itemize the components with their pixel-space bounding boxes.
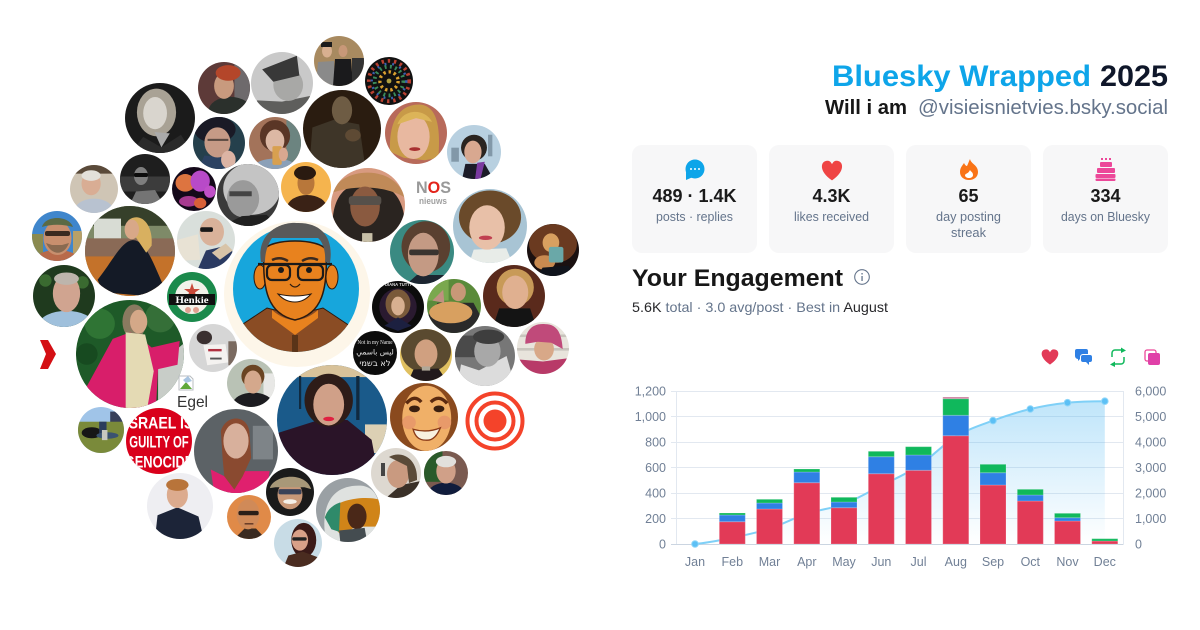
right axis labels: 6,000 — [1135, 384, 1166, 398]
logo: NOS nieuws — [416, 178, 451, 207]
month labels — [685, 555, 1116, 569]
icon: heart — [822, 161, 842, 180]
avatar: woman with pink hat — [517, 322, 569, 374]
right axis labels — [1135, 384, 1166, 552]
avatar: man with cap — [32, 211, 82, 261]
avatar: person with black dog — [78, 407, 124, 453]
month labels: Sep — [982, 555, 1004, 569]
logo: NOS nieuws: NOS — [416, 178, 451, 197]
right axis labels: 4,000 — [1135, 436, 1166, 450]
left axis labels — [635, 384, 666, 552]
icon: flame — [960, 159, 978, 180]
panel: day posting streak: day posting — [936, 210, 1001, 224]
engagement summary: 5.6K total · 3.0 avg/post · Best in August — [632, 299, 888, 315]
icon: info — [855, 270, 869, 284]
panel: days on Bluesky: 334 — [1090, 186, 1121, 206]
panel: likes received: likes received — [794, 210, 869, 224]
avatar: man with curly grey hair — [400, 329, 452, 381]
month labels: May — [832, 555, 857, 569]
avatar: man in navy sweater — [147, 473, 213, 539]
avatar: man in dark room — [303, 90, 381, 168]
avatar: woman in pink coat — [76, 300, 184, 408]
title year: 2025 — [1100, 60, 1168, 93]
avatar: portrait in black ring — [372, 281, 424, 333]
right axis labels: 2,000 — [1135, 486, 1166, 500]
avatar: bald man in sunglasses — [177, 211, 235, 269]
icon: broken image — [179, 376, 193, 390]
month labels: Aug — [945, 555, 967, 569]
panel: posts and replies: posts · replies — [656, 210, 733, 224]
avatar: man on yellow — [281, 162, 331, 212]
icon: birthday cake — [1096, 158, 1116, 181]
avatar: Henkie beer logo: Henkie — [176, 295, 208, 305]
right axis labels: 1,000 — [1135, 512, 1166, 526]
avatar: short-haired woman — [227, 359, 275, 407]
icon: reposts legend — [1110, 348, 1126, 367]
panel: posts and replies: 489 · 1.4K — [652, 186, 736, 206]
avatar: man with long hair and glasses — [390, 220, 454, 284]
avatar: woman in dark sweater — [277, 365, 387, 475]
avatar: curly man with glasses — [193, 116, 245, 169]
avatar: main cartoon man — [224, 221, 370, 367]
month labels: Jun — [871, 555, 891, 569]
avatar: red target logo — [468, 394, 522, 448]
panel: days on Bluesky — [1043, 145, 1168, 253]
icon: quotes legend — [1145, 350, 1160, 365]
avatar: Israel is guilty of genocide: GUILTY OF — [129, 434, 189, 452]
avatar: blonde woman on sofa — [85, 206, 175, 296]
avatar: army man — [251, 52, 313, 114]
icon: likes legend — [1042, 349, 1058, 365]
left axis labels: 200 — [645, 512, 666, 526]
avatar: blonde woman black and white — [125, 83, 195, 153]
cumulative area — [695, 401, 1105, 544]
left axis labels: 600 — [645, 461, 666, 475]
avatar: smiling woman with hat — [266, 468, 314, 516]
avatar: Not in my Name: ليس باسمي — [356, 347, 394, 356]
left axis labels: 1,000 — [635, 410, 666, 424]
month labels: Apr — [797, 555, 817, 569]
avatar: white-haired older man — [424, 451, 468, 495]
icon: replies legend — [1075, 349, 1092, 365]
avatar: two men in suits — [314, 36, 364, 86]
heading: Your Engagement: Your Engagement — [632, 265, 843, 292]
avatar: woman with curly blonde hair — [483, 265, 545, 327]
month labels: Jul — [911, 555, 926, 569]
avatar: Not in my Name — [353, 331, 397, 375]
right axis labels: 0 — [1135, 538, 1142, 552]
logo: NOS nieuws: nieuws — [419, 196, 447, 207]
label: Egel alt text: Egel — [177, 394, 208, 411]
avatar: white-haired man — [70, 165, 118, 213]
month labels: Feb — [722, 555, 743, 569]
avatar: Israel is guilty of genocide: ISRAEL IS — [125, 414, 193, 432]
avatar: sunglasses man dark — [120, 154, 170, 204]
icon: red chevron — [40, 340, 56, 369]
user name: Will i am — [825, 97, 907, 119]
month labels: Dec — [1094, 555, 1116, 569]
avatar cluster — [32, 36, 579, 567]
avatar: man on green foliage — [33, 265, 95, 327]
icon: speech bubble — [686, 160, 704, 180]
panel: day posting streak — [906, 145, 1031, 253]
month labels: Mar — [759, 555, 780, 569]
chart legend — [1042, 348, 1160, 367]
avatar: Not in my Name: Not in my Name — [357, 340, 393, 346]
month labels: Jan — [685, 555, 705, 569]
line points — [692, 398, 1108, 547]
avatar: man in profile — [371, 448, 421, 498]
avatar: ski goggles — [316, 478, 380, 542]
avatar: Israel is guilty of genocide — [125, 408, 193, 474]
avatar: coffee illustration — [527, 224, 579, 276]
right axis labels: 5,000 — [1135, 410, 1166, 424]
avatar: grey-haired woman — [217, 163, 280, 226]
avatar: purple abstract — [172, 167, 216, 211]
stacked bars — [719, 397, 1118, 544]
avatar: black and white portrait — [455, 326, 515, 386]
avatar: woman with skyline — [447, 125, 501, 179]
title: Bluesky Wrapped — [832, 60, 1091, 93]
avatar: blonde woman — [385, 102, 447, 164]
right axis labels: 3,000 — [1135, 461, 1166, 475]
panel: posts and replies — [632, 145, 757, 253]
avatar: woman in sunglasses — [274, 519, 322, 567]
avatar: portrait in black ring: DIANA TUTTI — [385, 282, 411, 287]
avatar: woman with hat and curly hair — [331, 168, 405, 242]
avatar: Israel is guilty of genocide: GENOCIDE — [125, 453, 193, 471]
avatar: Not in my Name: לא בשמי — [359, 358, 391, 368]
left axis labels: 1,200 — [635, 384, 666, 398]
panel: likes received — [769, 145, 894, 253]
panel: day posting streak: streak — [951, 226, 987, 240]
avatar: curly-haired woman — [453, 189, 527, 263]
avatar: protest sign photo — [189, 324, 237, 372]
cumulative line — [695, 401, 1105, 544]
avatar: bald man on orange — [227, 495, 271, 539]
panel: days on Bluesky: days on Bluesky — [1061, 210, 1151, 224]
avatar: woman in pink top — [194, 409, 278, 493]
avatar: cartoon woman — [390, 383, 458, 451]
avatar: red-haired man — [198, 62, 250, 114]
panel: likes received: 4.3K — [812, 186, 850, 206]
chart: monthly engagement with cumulative line — [635, 384, 1166, 569]
left axis labels: 400 — [645, 486, 666, 500]
avatar: rose window — [365, 57, 413, 105]
user handle: @visieisnietvies.bsky.social — [918, 97, 1168, 119]
panel: day posting streak: 65 — [958, 186, 979, 206]
left axis labels: 800 — [645, 436, 666, 450]
month labels: Oct — [1021, 555, 1041, 569]
avatar: man holding dog — [427, 279, 481, 333]
left axis labels: 0 — [659, 538, 666, 552]
month labels: Nov — [1056, 555, 1079, 569]
avatar: Henkie beer logo — [167, 272, 217, 322]
avatar: woman with beer — [249, 117, 301, 169]
